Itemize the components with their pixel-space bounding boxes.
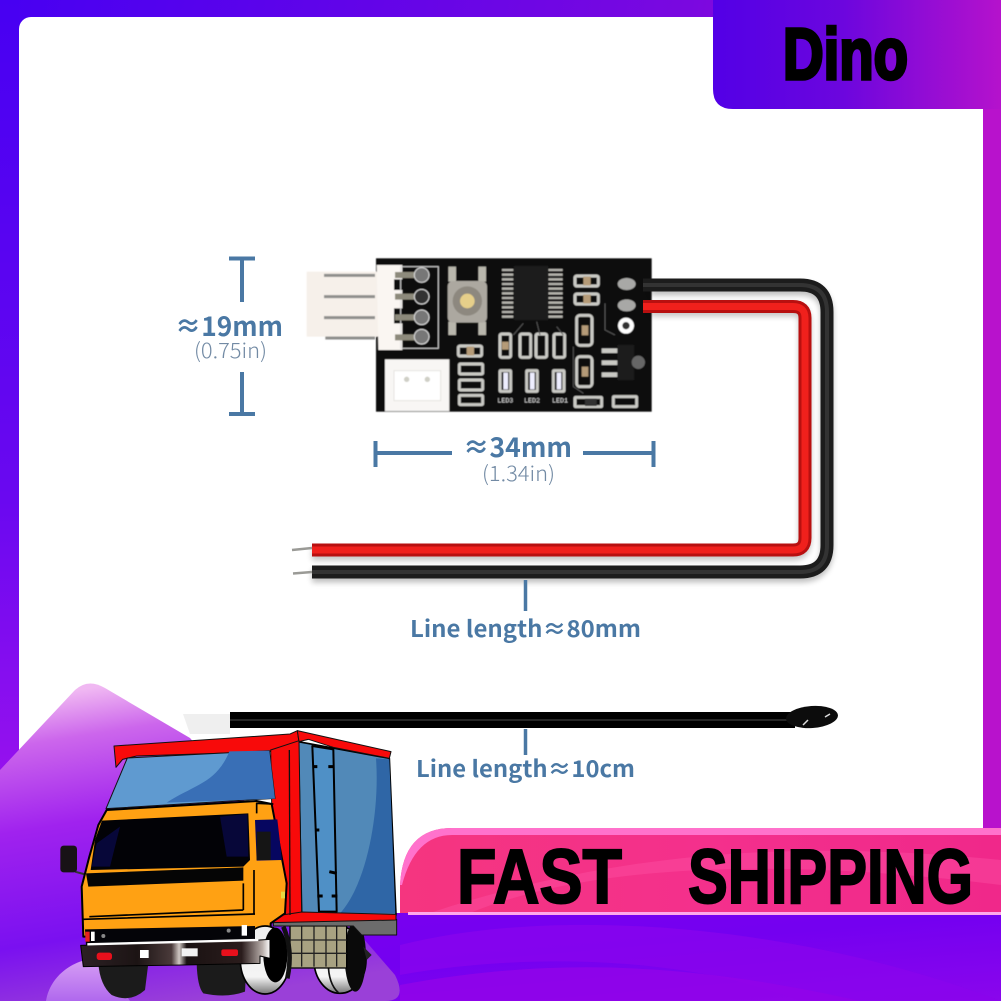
probe length callout: Line length≈10cm xyxy=(416,750,635,784)
chip xyxy=(502,266,563,320)
white sensor socket xyxy=(385,359,449,411)
width label: ≈34mm xyxy=(463,426,572,465)
trace lines xyxy=(513,303,615,393)
probe bead xyxy=(785,704,839,730)
probe plug xyxy=(183,714,230,734)
cable length callout: Line length≈80mm xyxy=(410,610,641,644)
height label inches: (0.75in) xyxy=(194,335,267,365)
chassis grid xyxy=(290,926,347,968)
mid stripe xyxy=(86,867,243,887)
fan connector xyxy=(307,265,438,350)
component bodies xyxy=(467,277,597,406)
height label: ≈19mm xyxy=(175,305,283,344)
chassis gray strip xyxy=(273,919,397,935)
stripped wire ends xyxy=(292,548,312,574)
cargo door xyxy=(312,746,337,912)
black wire xyxy=(312,285,827,572)
bottom band xyxy=(0,913,1001,1001)
push button xyxy=(448,267,487,335)
solder pads xyxy=(618,278,636,334)
lavender bump xyxy=(46,958,130,1001)
silkscreen labels: LED1 xyxy=(552,397,568,405)
surface mount parts xyxy=(458,276,637,407)
banner text: fast: FAST xyxy=(457,834,622,920)
red wire xyxy=(312,306,805,550)
LED pads xyxy=(503,373,561,389)
cargo box xyxy=(298,742,396,915)
brand tab xyxy=(713,0,1001,109)
grille xyxy=(85,925,255,945)
cab xyxy=(82,801,287,937)
front tyres xyxy=(98,926,290,998)
decorative triangle xyxy=(0,683,400,1001)
bumper xyxy=(81,939,270,967)
rear wheels xyxy=(314,922,372,993)
circuit board xyxy=(307,258,652,412)
indicator xyxy=(281,892,285,898)
silkscreen labels: LED3 xyxy=(497,397,513,405)
fast shipping banner xyxy=(400,828,1001,920)
temperature probe xyxy=(183,704,839,734)
icon: delivery truck xyxy=(60,731,397,998)
brand name: Dino xyxy=(783,15,908,95)
width label inches: (1.34in) xyxy=(482,458,555,488)
roof windscreen xyxy=(106,751,275,809)
red frame xyxy=(114,731,396,923)
windshield xyxy=(91,813,250,870)
probe wire xyxy=(230,712,795,728)
silkscreen labels xyxy=(497,397,568,405)
two-core cable xyxy=(292,285,827,576)
regulator xyxy=(602,345,645,380)
side window xyxy=(255,819,282,861)
dimension: width xyxy=(375,426,654,488)
silkscreen labels: LED2 xyxy=(524,397,540,405)
mirror xyxy=(60,846,87,875)
dimension: height xyxy=(175,258,283,414)
